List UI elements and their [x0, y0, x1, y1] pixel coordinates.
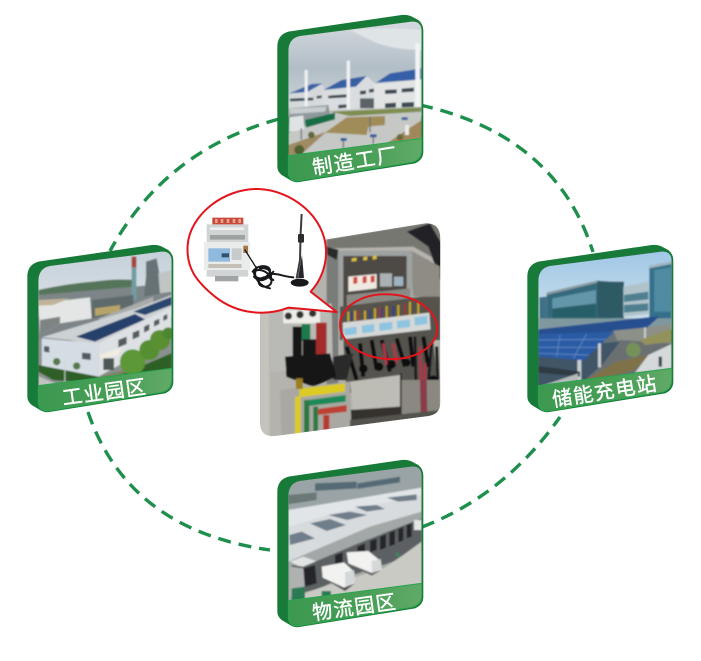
label band: logistics park — [288, 583, 422, 626]
card: logistics park — [277, 460, 423, 627]
central cabinet and meter callout — [187, 189, 443, 440]
red highlight ellipse: meters — [338, 291, 439, 362]
card: industrial park — [27, 245, 174, 412]
icon: energy meter — [204, 218, 250, 281]
card: energy storage station — [527, 245, 673, 412]
photo: industrial park — [37, 250, 174, 390]
photo: factory — [287, 20, 423, 158]
label band: logistics park: 物流园区 — [311, 590, 398, 625]
photo: logistics warehouse — [287, 465, 423, 605]
icon: antenna — [291, 214, 309, 287]
label band: industrial park: 工业园区 — [61, 375, 148, 410]
dashed connection ring — [88, 105, 593, 550]
label band: industrial park — [38, 368, 172, 411]
icon: antenna cable — [245, 250, 293, 288]
photo: solar carport and offices — [537, 250, 673, 390]
label band: energy storage station: 储能充电站 — [551, 372, 659, 412]
callout bubble — [187, 189, 337, 313]
photo: distribution cabinet — [258, 220, 443, 440]
card: manufacturing plant — [277, 15, 423, 182]
label band: manufacturing plant — [288, 138, 422, 181]
label band: manufacturing plant: 制造工厂 — [311, 143, 400, 180]
